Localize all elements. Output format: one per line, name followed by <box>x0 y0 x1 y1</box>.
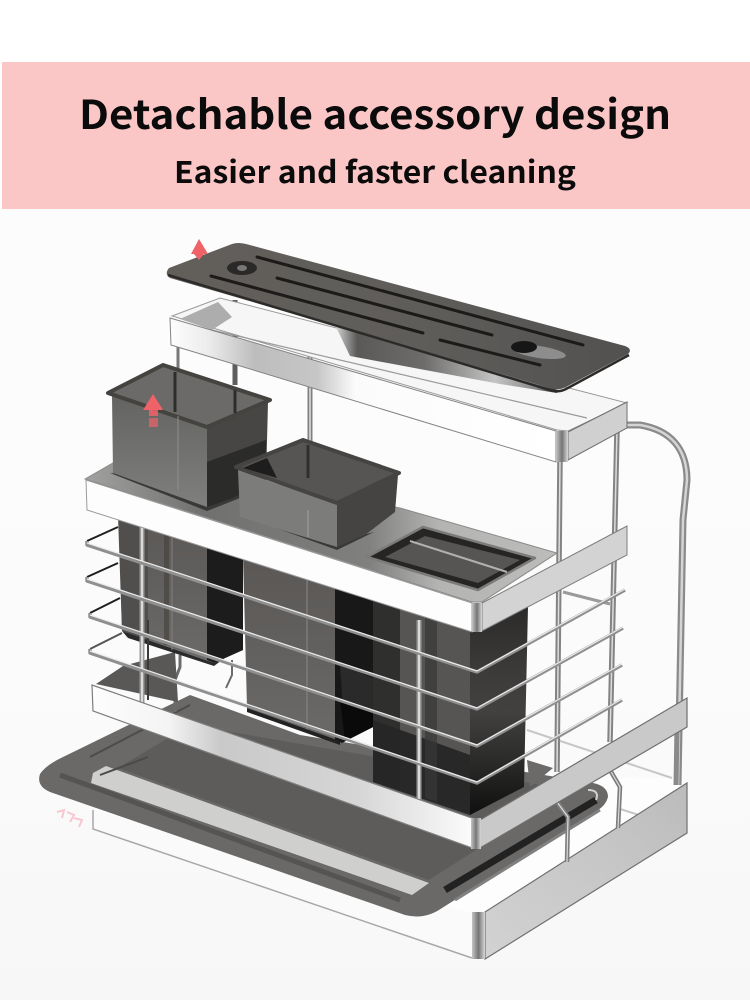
lower shelf interior <box>96 652 553 787</box>
detachable knife lid <box>167 243 630 393</box>
shelf top surface <box>85 458 557 602</box>
cup 1 front face <box>112 395 207 507</box>
photo background <box>0 209 750 1000</box>
cup 1 with lift arrow <box>108 365 270 511</box>
middle shelf <box>85 458 627 632</box>
lower feet wires <box>175 655 677 862</box>
tray shell <box>39 695 608 916</box>
wire rack rails <box>87 527 625 783</box>
right lower cup body <box>373 596 528 815</box>
cup 1 rim <box>108 365 270 427</box>
left lower cup body <box>118 512 243 666</box>
base frame side <box>472 783 687 959</box>
upper frame <box>170 298 627 462</box>
tray inner light strip <box>91 766 429 895</box>
shelf right face <box>482 526 627 631</box>
arrow: lift lid <box>191 239 208 260</box>
title: Detachable accessory design <box>79 83 671 141</box>
drip tray <box>39 695 608 916</box>
lid slots <box>211 257 583 365</box>
cup 1 base recess <box>110 473 240 511</box>
front wire rack posts <box>142 515 419 800</box>
lid reflection edge <box>335 325 558 393</box>
lower shelf <box>92 685 687 849</box>
shelf front face <box>86 480 472 632</box>
back rod <box>627 425 687 785</box>
basket slot <box>367 527 535 590</box>
base frame: interior and back lines <box>93 730 687 958</box>
tray floor <box>118 725 570 880</box>
center lower cup body <box>243 555 373 745</box>
support posts (rear) <box>178 300 617 772</box>
arrow: lift cup <box>143 394 163 427</box>
lid holes <box>227 261 257 275</box>
cup 2 <box>236 440 399 550</box>
cup 1 side face <box>207 402 268 507</box>
subtitle: Easier and faster cleaning <box>174 148 576 192</box>
tray right rim <box>445 800 596 890</box>
lid top <box>167 243 630 389</box>
header banner <box>2 62 750 209</box>
pink mark <box>57 810 82 827</box>
